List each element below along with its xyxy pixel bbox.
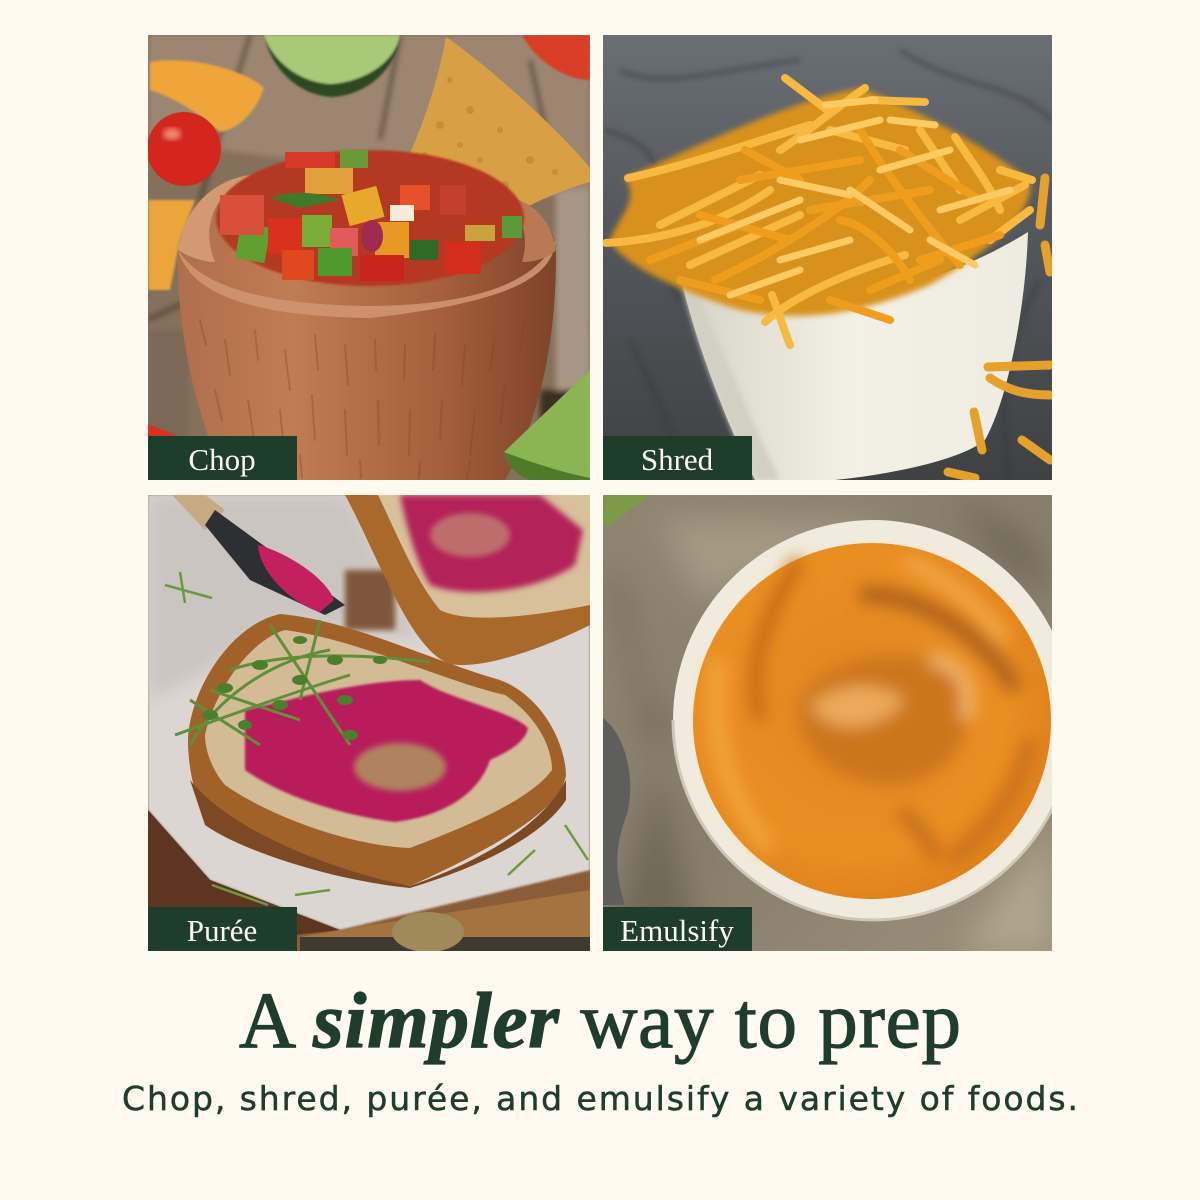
icon: spoon: [603, 718, 630, 905]
icon: wooden bowl: [178, 175, 556, 480]
subheading: Chop, shred, purée, and emulsify a variety of foods.: [122, 1079, 1078, 1118]
panel: emulsify photo: [603, 495, 1073, 951]
label: Shred: [603, 436, 752, 480]
icon: tortilla chip: [407, 37, 590, 218]
icon: lime wedge: [504, 370, 590, 480]
label: Emulsify: [603, 907, 752, 951]
salsa: [216, 150, 524, 286]
label: Emulsify: Emulsify: [620, 913, 734, 948]
icon: white cup: [680, 232, 1028, 483]
label: Purée: [148, 907, 297, 951]
icon: knife: [172, 495, 345, 615]
microgreens: [165, 572, 588, 905]
panel: chop photo: [147, 35, 590, 480]
back toast: [345, 495, 590, 665]
loose cheese pieces: [948, 178, 1050, 478]
heading: A simpler way to prep: [239, 978, 961, 1065]
label: Chop: Chop: [188, 442, 256, 477]
sauce: [693, 543, 1051, 899]
icon: white bowl: [673, 520, 1073, 920]
label: Chop: [148, 436, 297, 480]
icon: shredded cheddar: [606, 78, 1032, 345]
panel: shred photo: [603, 35, 1052, 483]
panel: puree photo: [148, 495, 590, 952]
label: Shred: Shred: [641, 442, 714, 477]
board bottom: [300, 890, 590, 937]
beet spread: [245, 680, 528, 822]
label: Purée: Purée: [187, 913, 257, 948]
front toast: [188, 614, 566, 888]
parchment: [148, 495, 590, 930]
